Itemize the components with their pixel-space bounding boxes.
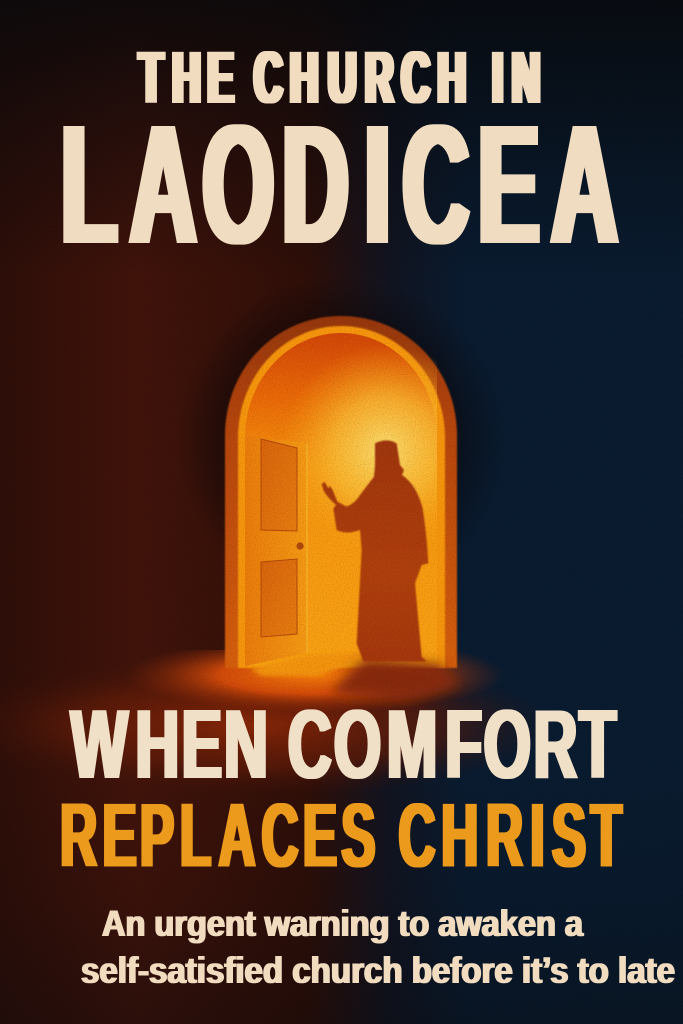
lit floor patch [250,652,364,676]
title line: The Church In: THE CHURCH IN [139,36,540,119]
figure silhouette [322,440,428,662]
light glow behind figure [280,345,437,660]
door upper panel [261,439,297,531]
illustration: arched doorway with figure [225,316,458,700]
figure floor shadow [330,658,458,700]
heading: When Comfort: WHEN COMFORT [71,690,616,800]
floor glow [0,650,560,800]
open door [245,436,307,666]
door knob [296,542,304,550]
subtitle line 1: An urgent warning to awaken a [102,903,583,944]
heading: Replaces Christ: REPLACES CHRIST [60,784,622,886]
bright arch band [238,326,445,668]
door lower panel [261,559,297,637]
title line: Laodicea: LAODICEA [61,89,618,279]
lit interior [245,333,437,666]
door frame outer jamb [225,316,457,668]
